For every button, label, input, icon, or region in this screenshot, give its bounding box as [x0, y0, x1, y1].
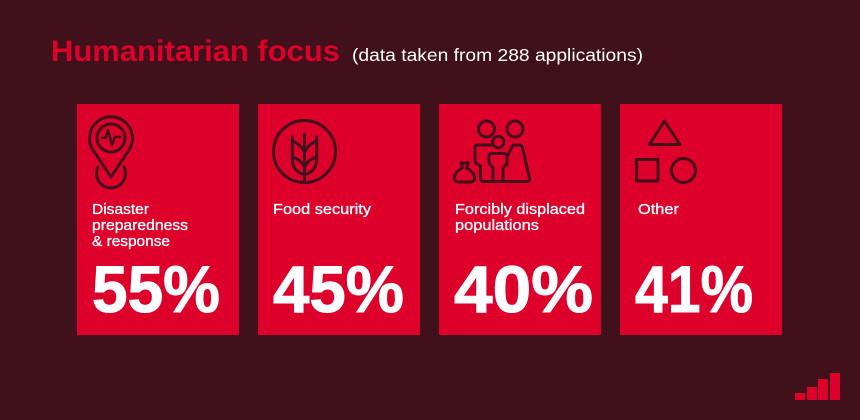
icon: triangle, square and circle	[636, 121, 696, 182]
subtitle: (data taken from 288 applications)	[352, 45, 643, 65]
panel: disaster preparedness	[77, 104, 239, 335]
label: disaster preparedness: preparedness	[92, 218, 188, 234]
panel: forcibly displaced populations	[439, 104, 601, 335]
value: 41%: 41%	[635, 252, 753, 326]
icon: family with bag	[454, 121, 530, 182]
label: forcibly displaced populations: populations	[455, 218, 539, 234]
panel: other	[620, 104, 782, 335]
label: forcibly displaced populations: Forcibly displaced	[455, 202, 585, 218]
panel: food security	[258, 104, 420, 335]
value: 40%: 40%	[454, 252, 593, 326]
label: food security: Food security	[273, 202, 372, 218]
logo: rising bars	[795, 373, 840, 400]
icon: map pin with pulse	[90, 117, 132, 188]
value: 55%: 55%	[92, 252, 220, 326]
value: 45%: 45%	[273, 252, 404, 326]
title: Humanitarian focus	[51, 35, 340, 68]
label: disaster preparedness: Disaster	[92, 202, 149, 218]
label: disaster preparedness: & response	[92, 234, 170, 250]
icon: wheat in circle	[274, 120, 336, 182]
label: other: Other	[638, 202, 679, 218]
